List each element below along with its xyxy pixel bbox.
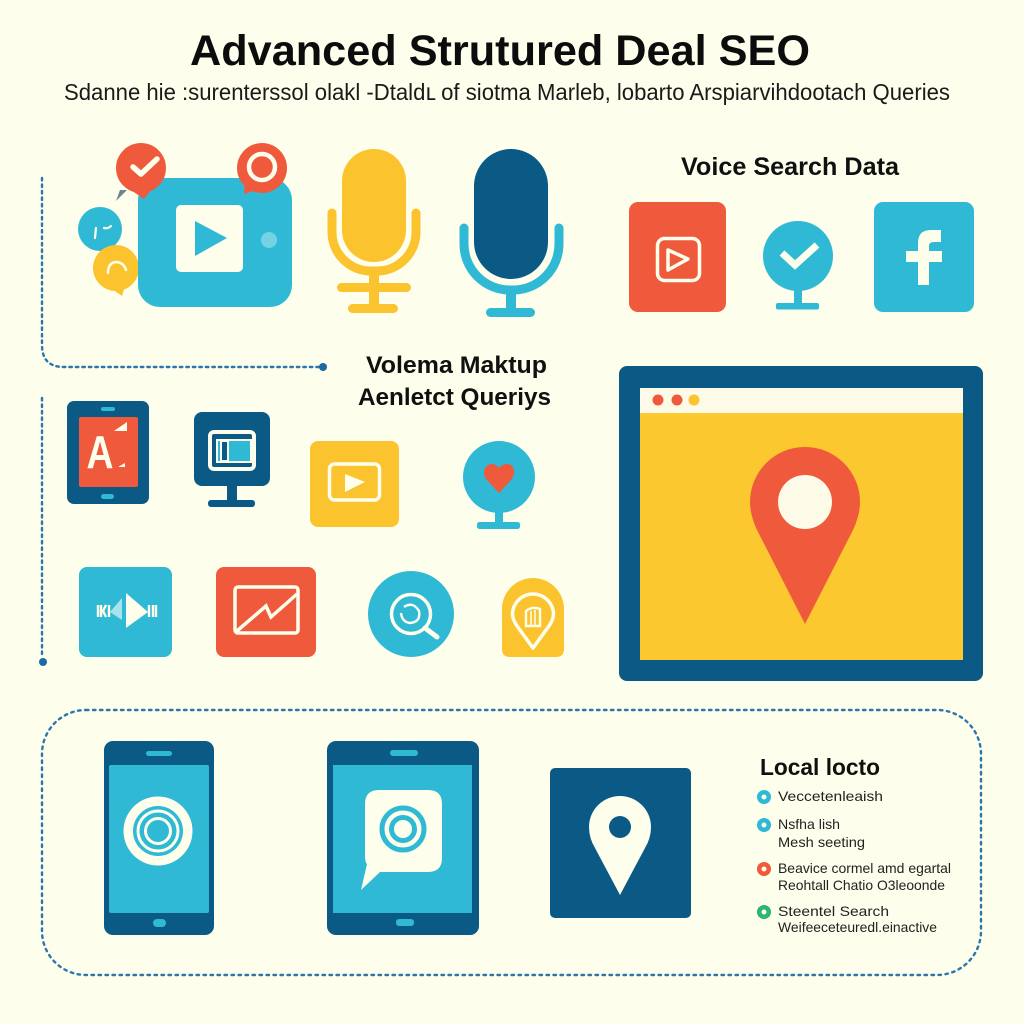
icon: red video tile [629, 202, 726, 312]
icon: navy tablet with letter A [67, 401, 149, 504]
icon: navy and blue microphone [464, 149, 559, 317]
list item 4: Steentel Search [778, 903, 889, 919]
heading: markup and queries: Volema Maktup [366, 352, 547, 379]
heading: local list: Local locto [760, 754, 880, 780]
icon: red line chart tile [216, 567, 316, 657]
icon: yellow location bulb [502, 578, 564, 657]
list item 2: Mesh seeting [778, 834, 865, 850]
icon: navy monitor [194, 412, 270, 507]
subtitle: Sdanne hie :surenterssol olakl -Dtaldւ of siotma Marleb, lobarto Arspiarvihdootach Queries [64, 79, 950, 105]
list item 1: Veccetenleaish [778, 788, 883, 804]
heading: markup and queries [358, 352, 551, 411]
icon grid: row one and two [67, 401, 564, 657]
list item 2: Nsfha lish [778, 816, 840, 832]
icon: red check bubble [116, 143, 166, 199]
icon: yellow microphone [332, 149, 416, 313]
connector: middle left dotted line [39, 398, 47, 666]
icon: map pin [750, 447, 860, 624]
video player body [138, 178, 292, 307]
heading: markup and queries: Aenletct Queriys [358, 384, 551, 411]
icon: tablet with chat bubble [327, 741, 479, 935]
icon: phone with target [104, 741, 214, 935]
icon: social f tile [874, 202, 974, 312]
icon group: video player with chat bubbles [78, 143, 292, 307]
icon: yellow bubble [93, 245, 139, 296]
browser toolbar [640, 388, 963, 413]
list item 4 [757, 903, 937, 935]
heading: voice search data: Voice Search Data [681, 153, 900, 181]
list item 3: Beavice cormel amd egartal [778, 860, 951, 876]
icon: navy tile with location pin [550, 768, 691, 918]
legend list [757, 788, 951, 935]
icon: blue check badge on stand [763, 221, 833, 310]
connector: top left dotted line [42, 178, 327, 371]
icon: yellow video tile [310, 441, 399, 527]
icon: blue media controls tile [79, 567, 172, 657]
icon: small blue bubble [78, 207, 122, 251]
panel: browser window with map pin [619, 366, 983, 681]
icon: magnifier badge [368, 571, 454, 657]
list item 4: Weifeeceteuredl.einactive [778, 919, 937, 935]
title: Advanced Strutured Deal SEO [190, 27, 810, 75]
panel: dashed bottom container [42, 710, 981, 975]
icon: heart badge on stand [463, 441, 535, 529]
list item 3: Reohtall Chatio O3leoonde [778, 877, 945, 893]
play button [176, 205, 243, 272]
list item 3 [757, 860, 951, 893]
icon: red ring bubble [237, 143, 287, 194]
list item 2 [757, 816, 865, 850]
icon: navy tablet with letter A: A [86, 426, 114, 478]
